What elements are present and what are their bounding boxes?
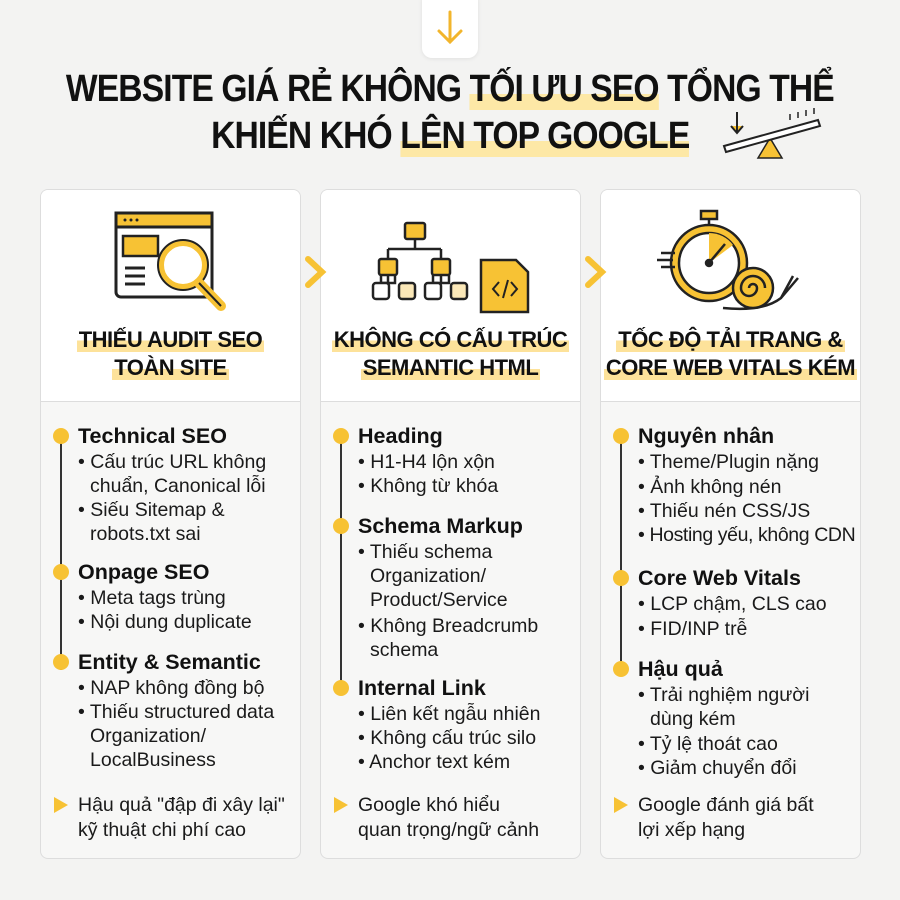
panel: speed [600, 189, 861, 859]
content column 3: Core Web Vitals [638, 566, 801, 590]
content column 3: lợi xếp hạng [638, 819, 745, 841]
icon: sitemap tree with code file [372, 222, 530, 314]
content column 2: Organization/ [370, 565, 486, 587]
card title: CORE WEB VITALS KÉM [606, 355, 855, 380]
content column 2: Heading [358, 424, 443, 448]
content column 1: • Siếu Sitemap & [78, 499, 225, 521]
content column 2: • Anchor text kém [358, 751, 510, 773]
content column 1: • NAP không đồng bộ [78, 677, 264, 699]
content column 2: • H1-H4 lộn xộn [358, 451, 495, 473]
card title: KHÔNG CÓ CẤU TRÚC [334, 327, 567, 352]
content column 2: • Thiếu schema [358, 541, 492, 563]
content column 1 [53, 424, 285, 841]
content column 1: Onpage SEO [78, 560, 209, 584]
content column 3: Nguyên nhân [638, 424, 774, 448]
content column 1: robots.txt sai [90, 523, 201, 545]
content column 3: • Theme/Plugin nặng [638, 451, 819, 473]
arrow: panel 1 to 2 [305, 256, 326, 288]
content column 2: • Liên kết ngẫu nhiên [358, 703, 540, 725]
panel: audit [40, 189, 301, 859]
card title [604, 326, 857, 380]
title line 1: WEBSITE GIÁ RẺ KHÔNG TỐI ƯU SEO TỔNG THỂ [66, 68, 834, 110]
content column 3: • Hosting yếu, không CDN [638, 524, 855, 546]
icon: browser with magnifier [114, 212, 226, 311]
content column 1: • Thiếu structured data [78, 701, 274, 723]
content column 3: • Tỷ lệ thoát cao [638, 733, 778, 755]
content column 3: • Ảnh không nén [638, 476, 781, 498]
card title: TỐC ĐỘ TẢI TRANG & [618, 327, 843, 352]
top tab with down arrow [422, 0, 478, 58]
content column 2: Schema Markup [358, 514, 523, 538]
icon: stopwatch and snail [657, 210, 799, 310]
content column 1: chuẩn, Canonical lỗi [90, 475, 266, 497]
card title: TOÀN SITE [114, 355, 227, 380]
content column 3: • Trải nghiệm người [638, 684, 809, 706]
content column 1: Hậu quả "đập đi xây lại" [78, 794, 285, 816]
content column 1: Technical SEO [78, 424, 227, 448]
content column 1: • Meta tags trùng [78, 587, 226, 609]
content column 3: • FID/INP trễ [638, 618, 747, 640]
arrow: panel 2 to 3 [585, 256, 606, 288]
content column 3: • Thiếu nén CSS/JS [638, 500, 810, 522]
content column 3: Google đánh giá bất [638, 794, 814, 816]
card title [77, 327, 264, 380]
title line 2: KHIẾN KHÓ LÊN TOP GOOGLE [211, 115, 689, 157]
content column 1: LocalBusiness [90, 749, 216, 771]
content column 2: quan trọng/ngữ cảnh [358, 819, 539, 841]
icon: seesaw [722, 108, 822, 159]
content column 2: • Không cấu trúc silo [358, 727, 536, 749]
content column 1: kỹ thuật chi phí cao [78, 819, 246, 841]
content column 2: schema [370, 639, 438, 661]
content column 1: • Cấu trúc URL không [78, 451, 266, 473]
content column 1: • Nội dung duplicate [78, 611, 252, 633]
card title: THIẾU AUDIT SEO [79, 327, 262, 352]
content column 3: dùng kém [650, 708, 736, 730]
content column 3 [613, 424, 855, 841]
content column 2: Product/Service [370, 589, 508, 611]
panel: semantic [320, 189, 581, 859]
content column 1: Entity & Semantic [78, 650, 261, 674]
content column 2 [333, 424, 540, 841]
content column 2: Google khó hiểu [358, 794, 500, 816]
content column 1: Organization/ [90, 725, 206, 747]
content column 3: • LCP chậm, CLS cao [638, 593, 827, 615]
card title: SEMANTIC HTML [363, 355, 538, 380]
content column 2: • Không Breadcrumb [358, 615, 538, 637]
content column 2: • Không từ khóa [358, 475, 498, 497]
card title [332, 326, 569, 380]
content column 2: Internal Link [358, 676, 486, 700]
content column 3: Hậu quả [638, 657, 723, 681]
content column 3: • Giảm chuyển đổi [638, 757, 797, 779]
